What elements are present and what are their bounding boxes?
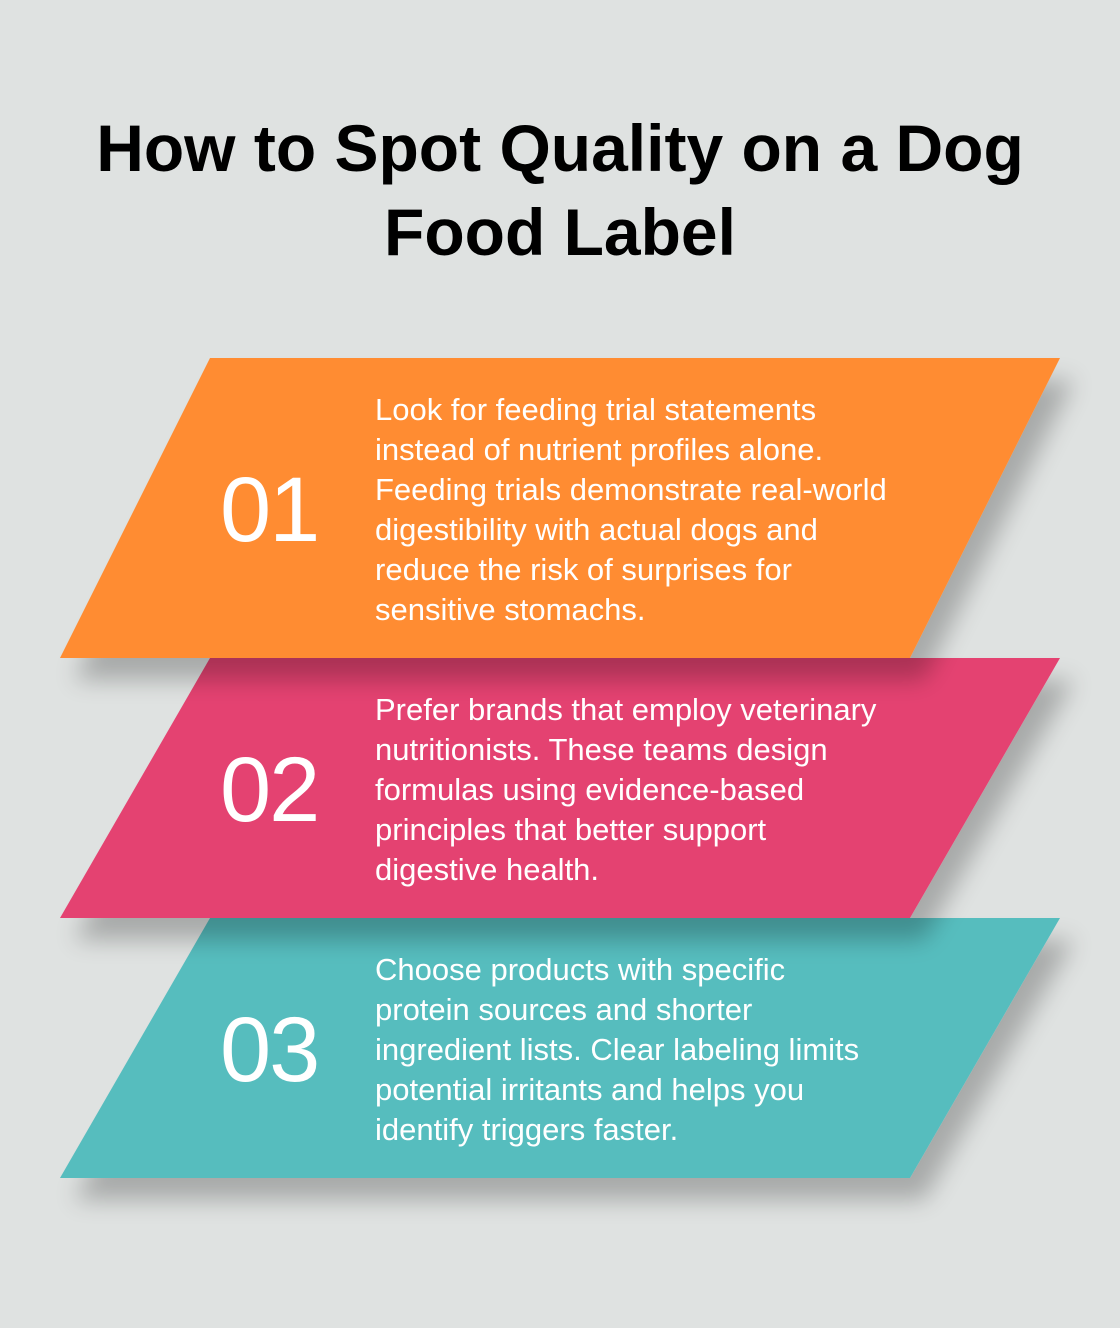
title: Food Label bbox=[384, 195, 736, 269]
text 1 bbox=[375, 392, 887, 627]
text 2: principles that better support bbox=[375, 812, 766, 847]
text 3: identify triggers faster. bbox=[375, 1112, 678, 1147]
text 1: reduce the risk of surprises for bbox=[375, 552, 792, 587]
panel 3 shape bbox=[60, 918, 1060, 1178]
text 3 bbox=[375, 952, 859, 1147]
panel 3 bbox=[220, 952, 859, 1147]
text 2: digestive health. bbox=[375, 852, 599, 887]
text 1: digestibility with actual dogs and bbox=[375, 512, 818, 547]
text 2: Prefer brands that employ veterinary bbox=[375, 692, 876, 727]
text 1: instead of nutrient profiles alone. bbox=[375, 432, 823, 467]
title: How to Spot Quality on a Dog bbox=[96, 111, 1024, 185]
text 3: potential irritants and helps you bbox=[375, 1072, 804, 1107]
text 3: protein sources and shorter bbox=[375, 992, 752, 1027]
text 2: formulas using evidence-based bbox=[375, 772, 804, 807]
text 2: nutritionists. These teams design bbox=[375, 732, 828, 767]
text 1: sensitive stomachs. bbox=[375, 592, 646, 627]
title bbox=[96, 111, 1024, 269]
panel 2 shape bbox=[60, 658, 1060, 918]
panel 1 bbox=[220, 392, 887, 627]
number 02: 02 bbox=[220, 739, 318, 841]
panel 2 bbox=[220, 692, 876, 887]
text 1: Feeding trials demonstrate real-world bbox=[375, 472, 887, 507]
number 03: 03 bbox=[220, 999, 318, 1101]
text 2 bbox=[375, 692, 876, 887]
text 3: Choose products with specific bbox=[375, 952, 785, 987]
number 01: 01 bbox=[220, 459, 318, 561]
text 1: Look for feeding trial statements bbox=[375, 392, 816, 427]
panel 1 shape bbox=[60, 358, 1060, 658]
text 3: ingredient lists. Clear labeling limits bbox=[375, 1032, 859, 1067]
